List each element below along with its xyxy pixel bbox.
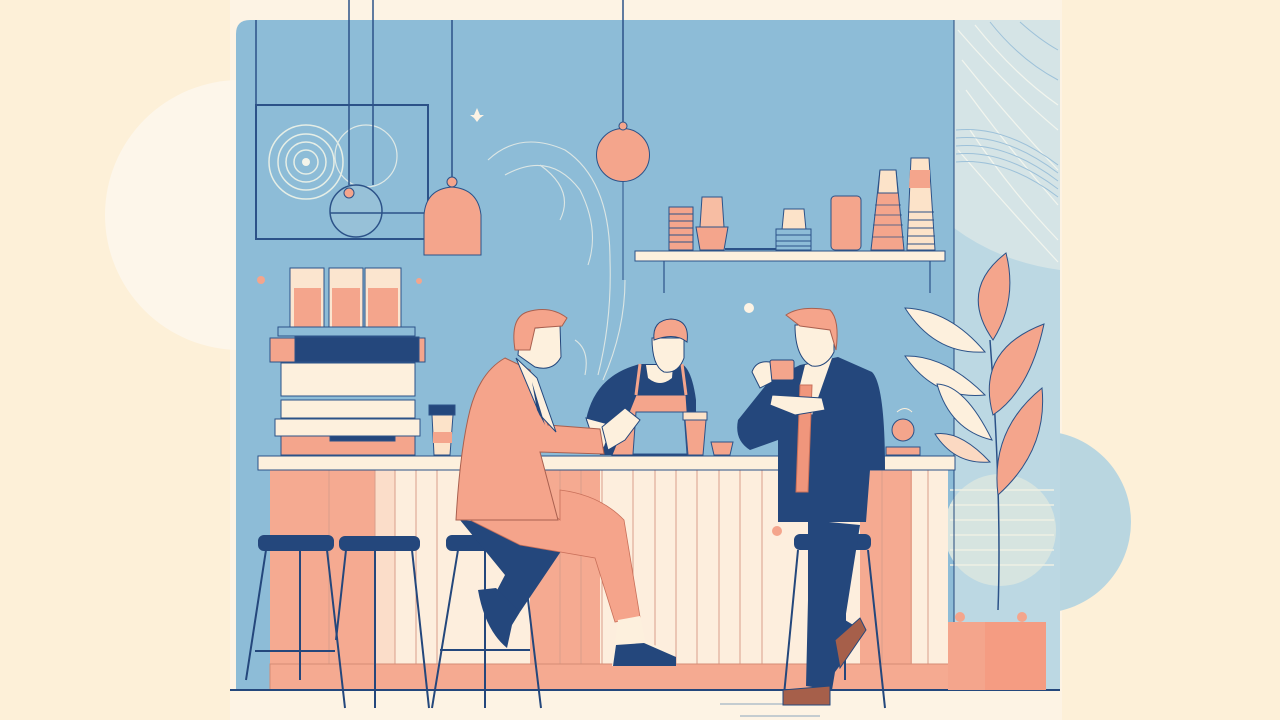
shelf with cups [635, 158, 945, 293]
laptop and counter items [633, 408, 920, 455]
bar counter [230, 456, 1060, 716]
blue wall panel [236, 20, 1060, 690]
steam swirls [488, 142, 625, 380]
man standing in navy suit [737, 308, 885, 705]
pendant lamps [330, 0, 650, 280]
barista [586, 319, 696, 455]
wall dots [257, 276, 782, 536]
bar stools [246, 535, 885, 708]
man seated in salmon suit [456, 310, 676, 666]
wall art frame [256, 20, 428, 240]
takeaway cup on counter [429, 405, 455, 455]
coffee machine [270, 268, 425, 455]
potted plant [905, 253, 1046, 690]
